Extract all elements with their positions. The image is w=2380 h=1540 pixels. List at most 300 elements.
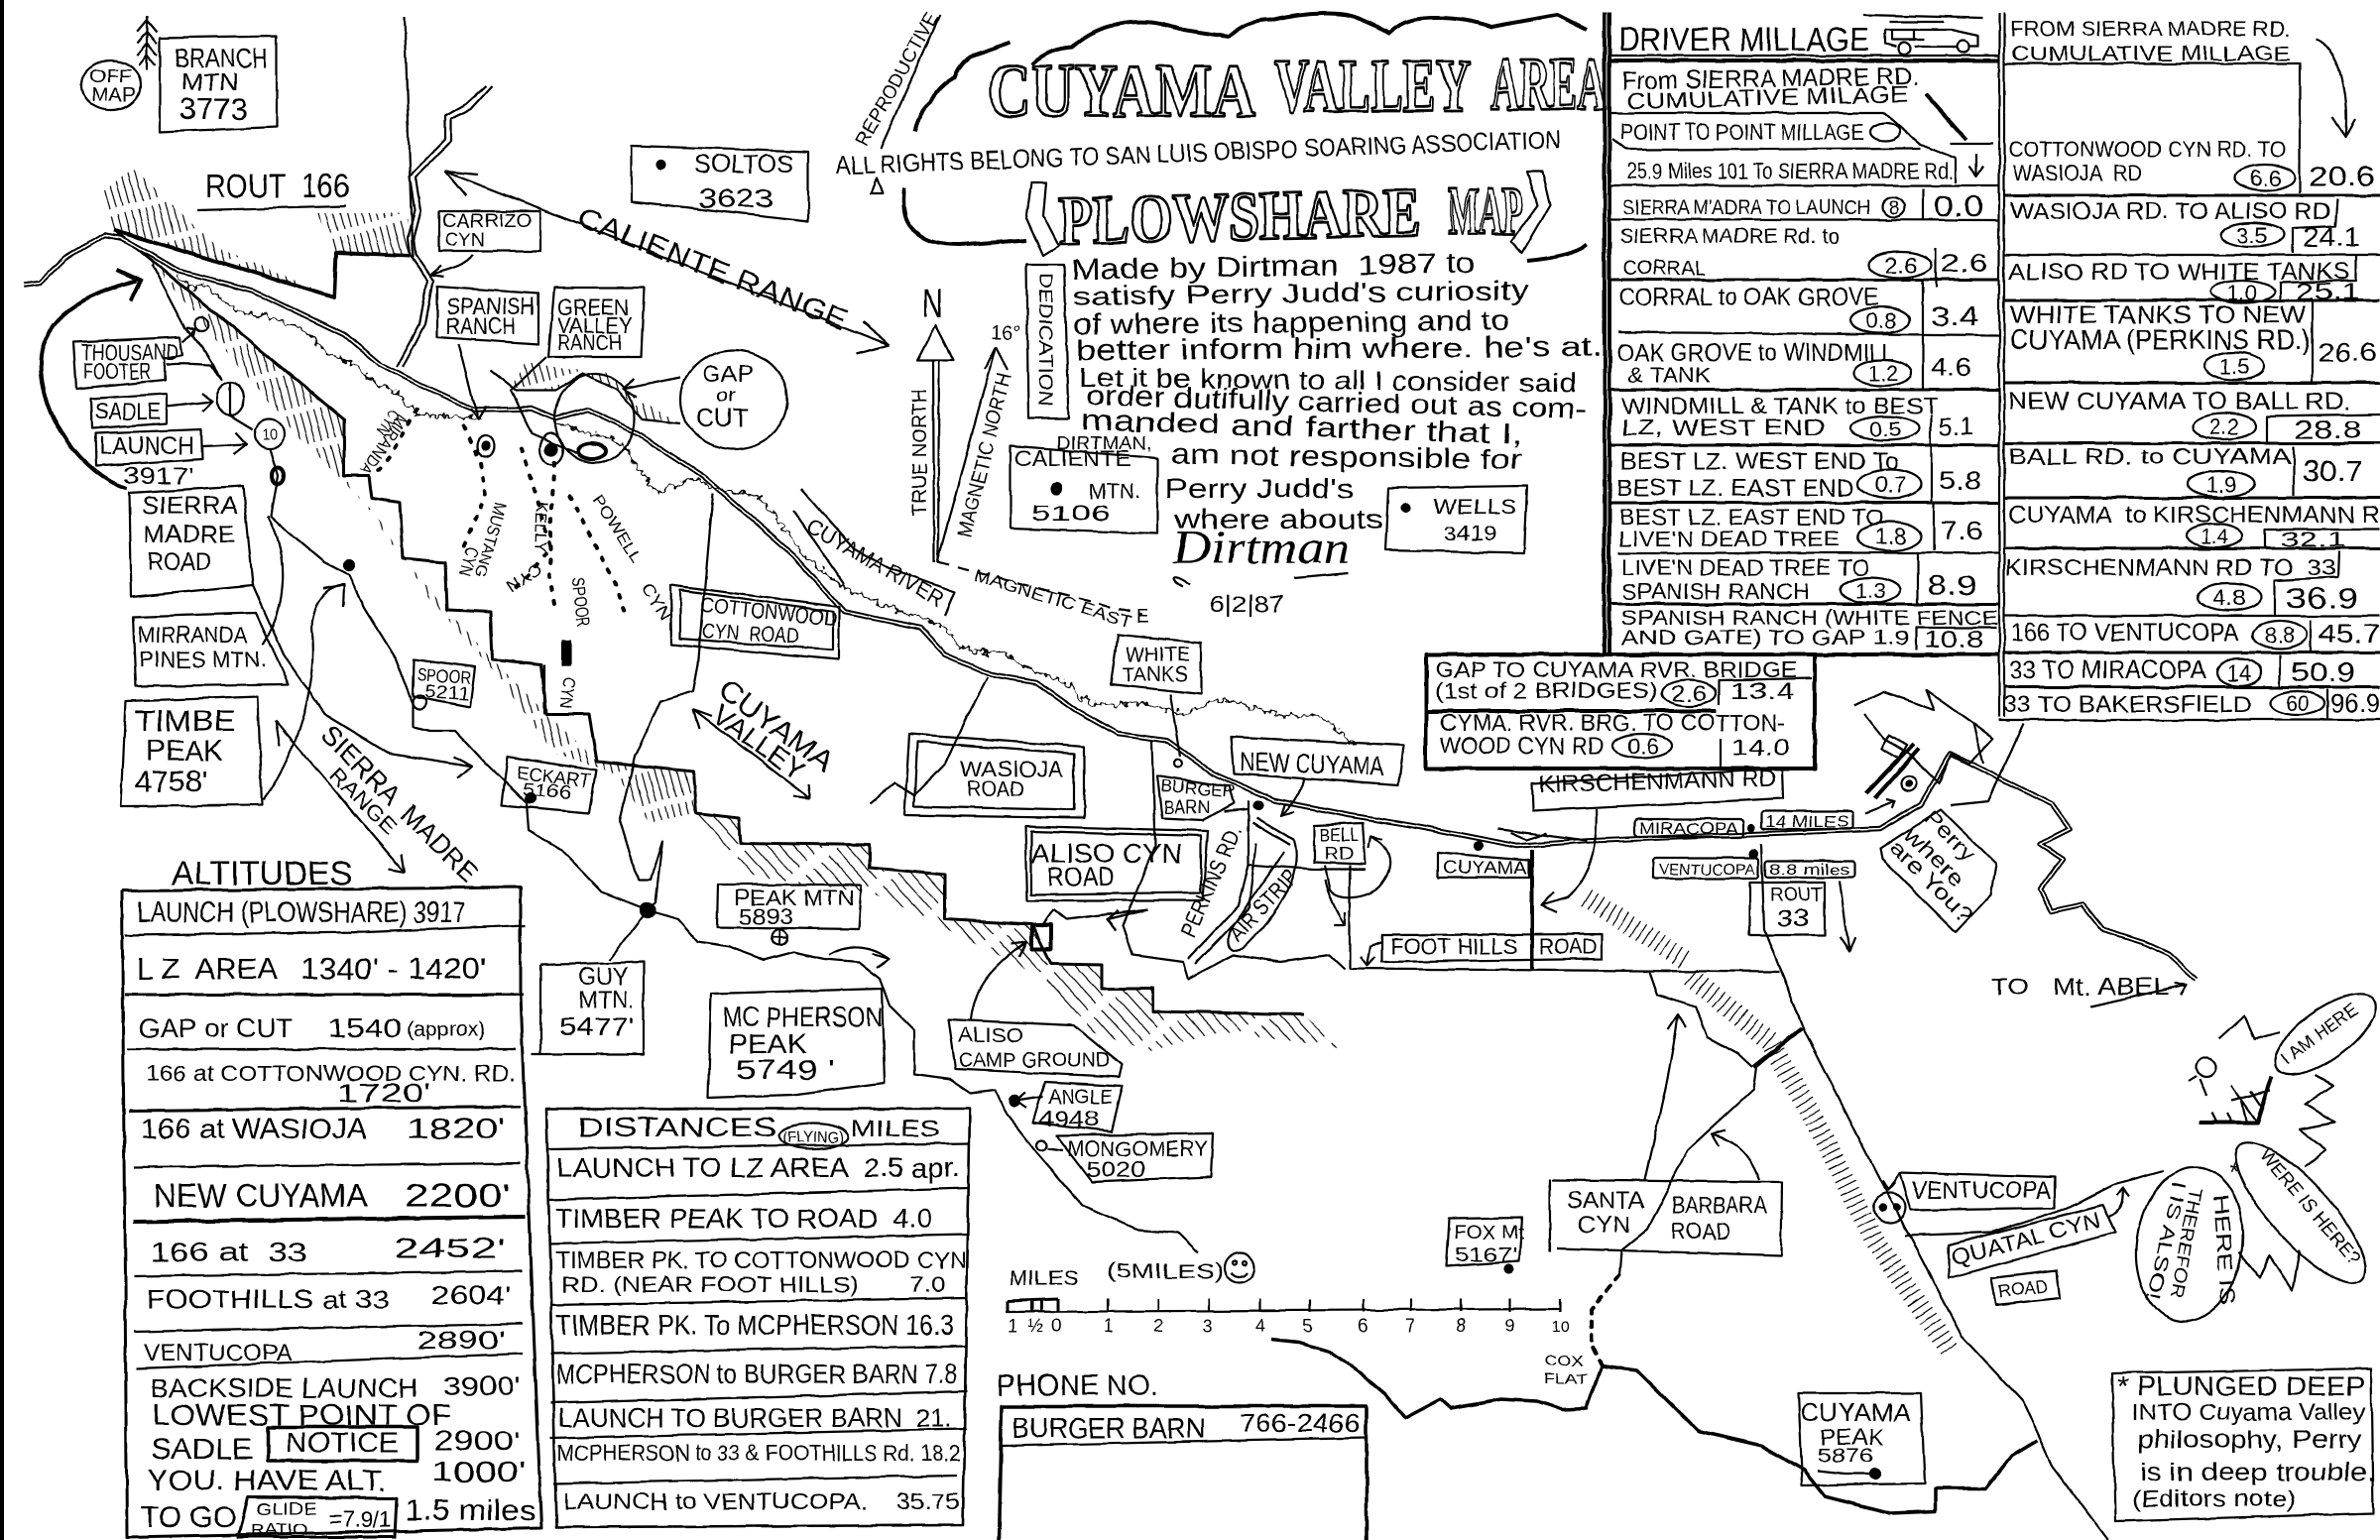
bubble: I am here [2263,980,2380,1089]
row: live and dead tree to Spanish Ranch [1611,553,1999,604]
panel: phone numbers: BURGER BARN [1012,1413,1205,1445]
scale bar: miles [1006,1253,1570,1336]
row: Aliso to White Tanks: ALISO RD TO WHITE TANKS [2008,259,2350,286]
tag: Ventucopa 8.8 miles: VENTUCOPA [1658,862,1755,879]
row: Spanish Ranch to gap [1606,607,1999,654]
box: Thousand Footer: FOOTER [83,358,151,384]
header: cumulative millage: CUMULATIVE MILLAGE [2011,43,2291,65]
row: to corral: SIERRA MADRE Rd. to [1619,225,1840,248]
row: you have alt: 1000' [431,1457,526,1488]
row: Aliso to White Tanks: 25.1 [2296,279,2360,305]
row: from Sierra Madre cumulative: CUMULATIVE MILAGE [1625,81,1909,114]
header: cumulative millage: FROM SIERRA MADRE RD. [2010,18,2291,41]
gap or cut hatching, circle and bubble [491,350,787,463]
dedication paragraph: Made by Dirtman 1987 to [1071,248,1476,287]
panel: gap to Cuyama river bridge mileage: CYMA. RVR. BRG. TO COTTON- [1440,710,1785,737]
label: Cox Flat: FLAT [1543,1370,1587,1387]
row: 166 to Ventucopa: 166 TO VENTUCOPA [2010,619,2239,647]
scale bar: miles: 10 [1552,1319,1570,1336]
box: McPherson Peak: 5749 ' [736,1054,835,1085]
box: Mongomery 5020: 5020 [1086,1157,1145,1182]
box: Dedication [1026,265,1069,418]
scale bar: miles: ½ [1028,1316,1043,1336]
box: Thousand Footer: THOUSAND [81,339,178,365]
row: sadle notice: NOTICE [286,1427,399,1458]
row: Kirschenmann to 33: KIRSCHENMANN RD TO 33 [2005,554,2335,580]
arrow and label: Caliente Range: CALIENTE RANGE [572,201,852,337]
box: Rout 33 [1749,883,1825,935]
row: McPherson to Burger Barn: MCPHERSON to BURGER BARN 7.8 [556,1359,958,1389]
row: from Sierra Madre cumulative: From SIERRA MADRE RD. [1621,62,1919,95]
row: Cuyama to Kirschenmann [2004,502,2380,551]
signature and date: Dirtman [1172,522,1350,574]
box: Spanish Ranch: RANCH [446,313,516,340]
box: Green Valley Ranch: RANCH [557,330,622,355]
box: Sierra Madre Road: ROAD [148,548,211,576]
row: Wasioja to Aliso: 3.5 [2236,223,2268,248]
row: Wasioja to Aliso: WASIOJA RD. TO ALISO RD [2010,198,2330,225]
row: Ball Rd to Cuyama [2004,444,2380,498]
box: Cottonwood Cyn Road: CYN ROAD [702,620,800,648]
gap or cut hatching, circle and bubble: or [716,386,736,406]
row: best LZ west to east: 0.7 [1874,472,1907,499]
compass: true and magnetic north: 16° [991,322,1021,344]
label: Cuyama River: CUYAMA RIVER [803,514,948,612]
heading row: distances: MILES [851,1116,940,1142]
bubble: Perry where are you [1880,805,1996,932]
row: corral to oak grove: 0.8 [1865,308,1897,333]
box: Santa Barbara Canyon Road: CYN [1577,1212,1631,1239]
box: Rout 33: ROUT [1770,885,1823,906]
row: Kirschenmann to 33: 36.9 [2286,583,2358,615]
box: Wasioja Road: ROAD [967,776,1024,801]
box: Santa Barbara Canyon Road: ROAD [1671,1219,1730,1245]
row: corral to oak grove: CORRAL to OAK GROVE [1618,284,1879,311]
row: to corral: CORRAL [1622,257,1706,280]
row: windmill to best LZ: LZ, WEST END [1621,415,1825,440]
row: 33 to Bakersfield: 33 TO BAKERSFIELD [2003,691,2251,717]
compass: true and magnetic north [908,280,1021,562]
box: Santa Barbara Canyon Road: SANTA [1567,1187,1644,1214]
box: Cuyama Peak: PEAK [1820,1424,1885,1450]
row: Spanish Ranch to gap: AND GATE) TO GAP 1.9 [1621,627,1909,650]
row: live and dead tree to Spanish Ranch: LIVE'N DEAD TREE TO [1621,555,1869,580]
row: 166 at Cottonwood: 166 at COTTONWOOD CYN. RD. [146,1061,516,1086]
box: Quatal Cyn [1949,1188,2129,1278]
canyon labels: SPOOR [568,576,593,628]
box: Mongomery 5020: MONGOMERY [1067,1136,1208,1161]
canyon dotted trails [372,410,625,714]
box: Aliso Camp Ground: CAMP GROUND [958,1049,1111,1072]
row: New Cuyama: 2200' [405,1177,511,1214]
box: Bell Rd [1314,823,1390,925]
row: Ball Rd to Cuyama: 1.9 [2206,472,2236,497]
row: to go glide ratio [141,1494,536,1539]
compass: true and magnetic north: MAGNETIC NORTH [954,371,1016,539]
row: Ball Rd to Cuyama: 30.7 [2303,455,2362,488]
panel: gap to Cuyama river bridge mileage: 0.6 [1627,734,1659,759]
label: Cox Flat: COX [1544,1353,1584,1369]
panel: phone numbers: 766-2466 [1240,1408,1361,1438]
box: Timbe Peak [121,585,344,806]
row: to corral [1611,225,1999,288]
row: best LZ west to east: BEST LZ. WEST END To [1620,448,1899,475]
row: to launch: 0.0 [1934,190,1983,223]
row: White Tanks to New Cuyama: CUYAMA (PERKINS RD.) [2010,324,2311,355]
box: Branch Mtn: 3773 [179,91,248,126]
box: Timbe Peak: 4758' [135,766,208,798]
row: best LZ to live and dead tree: 7.6 [1941,516,1983,545]
row: Foothills at 33: FOOTHILLS at 33 [147,1284,389,1314]
row: oak grove to windmill: OAK GROVE to WINDMILL [1616,339,1894,367]
panel: gap to Cuyama river bridge mileage: 2.6 [1671,681,1707,706]
row: from Sierra Madre cumulative [1609,62,1993,182]
row: to corral: 2.6 [1941,250,1988,278]
box: Green Valley Ranch: GREEN [557,295,629,321]
box: Peak Mtn: PEAK MTN [734,886,855,910]
box: Sierra Madre Road: MADRE [144,521,235,548]
row: New Cuyama to Ball Rd: 2.2 [2209,415,2239,439]
row: Timber to Cottonwood: TIMBER PK. TO COTTONWOOD CYN [555,1247,967,1274]
box: Branch Mtn: MTN [181,69,238,96]
bubble: here is I therefor is also [2127,1156,2252,1329]
title cloud outline [903,14,1587,261]
box: Guy Mtn: MTN. [579,987,635,1014]
scale bar: miles: 7 [1405,1316,1415,1336]
box: Cottonwood Cyn Road [670,585,839,659]
row: 101 to Sierra Madre: 25.9 Miles 101 To SIERRA MADRE Rd. [1626,159,1954,183]
Sierra Madre road [194,317,354,570]
box: Launch: 3917' [124,463,193,490]
box: Spanish Ranch [437,287,538,457]
row: to launch: SIERRA M'ADRA TO LAUNCH [1622,196,1870,219]
box: Mirranda Pines Mtn: PINES MTN. [139,647,266,672]
row: 166 at Wasioja [141,1114,506,1145]
panel: gap to Cuyama river bridge mileage: GAP TO CUYAMA RVR. BRIDGE [1435,657,1797,682]
box: Santa Barbara Canyon Road: BARBARA [1671,1192,1767,1219]
row: sadle notice: 2900' [433,1426,521,1456]
row: corral to oak grove: 3.4 [1931,301,1978,331]
box: Aliso Cyn Road [1025,826,1208,930]
box: Carrizo Cyn: CARRIZO [442,211,532,232]
box: Mirranda Pines Mtn: MIRRANDA [138,622,249,648]
dedication paragraph: better inform him where. he's at. [1076,331,1602,367]
box: Cuyama Peak [1798,1393,1925,1485]
row: White Tanks to New Cuyama [2004,300,2380,383]
row: gap or cut: (approx) [407,1019,486,1041]
heading row: distances [578,1112,940,1149]
label: To Mt. Abel: TO Mt. ABEL [1991,974,2169,1001]
row: best LZ to live and dead tree [1618,503,1999,553]
row: best LZ west to east [1611,445,1999,503]
row: gap or cut: 1540 [327,1013,402,1043]
box: Cuyama Peak: 5876 [1817,1446,1874,1467]
icon: smiley [1225,1253,1254,1283]
row: launch: LAUNCH (PLOWSHARE) 3917 [137,896,466,929]
label: Perkins Rd: PERKINS RD. [1175,822,1247,941]
scale bar: miles: 5 [1303,1316,1313,1336]
row: 166 at Wasioja: 166 at WASIOJA [141,1114,368,1145]
row: point to point: POINT TO POINT MILLAGE [1620,119,1864,145]
row: 33 to Bakersfield: 60 [2286,691,2310,716]
row: windmill to best LZ: 0.5 [1869,418,1901,441]
box: Timbe Peak: TIMBE [135,705,236,738]
note: editor's note: is in deep trouble. [2140,1459,2375,1486]
row: 33 to Miracopa: 50.9 [2291,656,2355,687]
compass: true and magnetic north: TRUE NORTH [908,389,931,516]
dedication paragraph: order dutifully carried out as com- [1086,380,1588,424]
scale bar: miles: 8 [1456,1316,1466,1336]
box: Aliso Cyn Road: ALISO CYN [1031,838,1182,869]
header: cumulative millage [2003,18,2355,193]
panel: altitudes table [122,888,541,1539]
row: windmill to best LZ: WINDMILL & TANK to BEST [1621,393,1939,418]
label: Rout 166: ROUT 166 [205,168,349,205]
highway 166 road [24,235,2197,980]
row: White Tanks to New Cuyama: WHITE TANKS TO NEW [2010,301,2306,329]
box: Aliso Camp Ground: ALISO [958,1024,1023,1047]
row: White Tanks to New Cuyama: 26.6 [2318,337,2377,367]
box: Rout 33: 33 [1777,905,1810,932]
row: best LZ west to east: 5.8 [1939,467,1981,495]
tag: Miracopa 14 miles [1634,799,1895,838]
row: 166 to Ventucopa [2004,619,2380,652]
row: 33 to Miracopa [2004,654,2380,687]
box: White Tanks [1111,635,1201,768]
row: live and dead tree to Spanish Ranch: 8.9 [1927,570,1976,602]
row: 33 to Bakersfield [1999,688,2380,720]
dedication paragraph: of where its happening and to [1073,305,1509,341]
icon: station wagon [1862,15,1983,55]
box: McPherson Peak: PEAK [728,1028,807,1059]
canyon labels: CYN [372,407,404,439]
row: Timber to Cottonwood: RD. (NEAR FOOT HILLS) 7.0 [561,1272,945,1297]
box: Spanish Ranch: SPANISH [446,294,536,320]
row: Kirschenmann to 33: 4.8 [2213,585,2245,612]
row: backside launch: 3900' [443,1371,521,1401]
row: launch to Burger Barn: LAUNCH TO BURGER BARN 21. [558,1403,952,1433]
box: Mirranda Pines Mtn [133,613,289,686]
box: Cuyama town [1438,842,1529,878]
box: Dedication: DEDICATION [1034,273,1055,407]
scale bar: miles: (5MILES) [1107,1260,1224,1283]
box: Green Valley Ranch [511,288,645,465]
box: Eckart 5166 [502,757,596,813]
box: Bell Rd: RD [1324,844,1354,864]
row: Foothills at 33 [147,1280,511,1314]
note: editor's note: * PLUNGED DEEP [2117,1371,2365,1401]
box: Cottonwood Cyn Road: COTTONWOOD [699,594,838,631]
box: Launch: LAUNCH [99,432,194,460]
bubble: off map: MAP [91,84,137,106]
scale bar: miles: 2 [1153,1316,1163,1336]
row: best LZ to live and dead tree: 1.8 [1874,524,1907,550]
box: Burger Barn: BARN [1163,797,1210,817]
box: McPherson Peak: MC PHERSON [723,1002,883,1032]
box: Wells 3419: WELLS [1433,496,1517,519]
arrow and label: Sierra Madre Range: SIERRA MADRE [315,719,484,888]
row: Foothills at 33: 2604' [431,1280,511,1310]
bubble: here is I therefor is also: * [2229,1156,2239,1186]
icon: pine tree [137,16,157,69]
scale bar: miles: 4 [1254,1316,1264,1336]
row: 33 to Miracopa: 33 TO MIRACOPA [2010,654,2207,684]
canyon labels: POWELL [589,491,646,566]
box: Soltos [632,146,808,221]
canyon labels: KELLY [531,501,551,552]
row: to go glide ratio: RATIO [251,1520,307,1539]
dedication paragraph: Let it be known to all I consider said [1079,363,1577,398]
arrow and label: Caliente Range [445,172,890,354]
label and arrow: Cuyama Valley: CUYAMA [712,673,839,778]
box: Wasioja Road: WASIOJA [960,757,1064,781]
dedication paragraph: satisfy Perry Judd's curiosity [1073,276,1530,311]
box: Cuyama Peak: CUYAMA [1800,1399,1911,1427]
box: Carrizo Cyn [430,211,540,277]
row: launch to Ventucopa: LAUNCH to VENTUCOPA. 35.75 [563,1488,960,1514]
row: Cottonwood to Wasioja [2004,137,2380,195]
terrain: ridge hatching and stepped mountain edge [99,169,1949,1349]
row: McPherson to 33: MCPHERSON to 33 & FOOTHILLS Rd. 18.2 [557,1440,960,1466]
box: Burger Barn [1157,775,1262,820]
row: Aliso to White Tanks: 1.0 [2227,282,2257,304]
dedication paragraph [1056,248,1602,534]
row: Cuyama to Kirschenmann: CUYAMA to KIRSCHENMANN R [2008,502,2380,529]
box: White Tanks: WHITE [1126,644,1190,666]
row: Wasioja to Aliso: 24.1 [2303,222,2360,252]
label: Magnetic East: MAGNETIC EAST [972,566,1133,632]
row: LZ area: 1340' - 1420' [300,953,486,986]
gap or cut hatching, circle and bubble: CUT [696,403,749,432]
row: 166 to Ventucopa: 45.7 [2319,619,2380,649]
row: New Cuyama [154,1177,511,1214]
river: Cuyama river squiggle [178,275,1355,744]
box: McPherson Peak [708,947,890,1098]
scale bar: miles: 9 [1505,1316,1515,1336]
row: 166 at Wasioja: 1820' [407,1114,506,1145]
loop arrow to launch area [41,270,141,489]
box: Angle 4948: ANGLE [1048,1086,1113,1109]
row: live and dead tree to Spanish Ranch: SPANISH RANCH [1621,579,1810,604]
arrow and label: Sierra Madre Range: RANGE [324,763,402,840]
box: Caliente Mtn: 5106 [1031,501,1111,526]
panel: distances table [546,1109,970,1527]
row: Cottonwood to Wasioja: 6.6 [2249,166,2281,190]
row: 166 at Cottonwood: 1720' [337,1078,431,1108]
row: to launch: 8 [1888,198,1899,219]
panel: gap to Cuyama river bridge mileage [1426,654,1815,769]
box: Santa Barbara Canyon Road [1550,1014,1782,1255]
row: backside launch [150,1371,521,1403]
signature and date [1172,522,1350,617]
box: Angle 4948 [1010,1082,1123,1131]
bubble: here is I therefor is also: HERE IS [2208,1194,2239,1306]
bubble: Air Strip: AIR STRIP [1224,865,1302,945]
box: Caliente Mtn: CALIENTE [1014,446,1130,471]
box: Branch Mtn [160,36,277,132]
box: Green Valley Ranch: VALLEY [557,313,633,338]
row: corral to oak grove [1618,280,1999,389]
row: oak grove to windmill: 1.2 [1868,361,1898,386]
row: New Cuyama to Ball Rd: NEW CUYAMA TO BALL RD. [2008,388,2350,415]
box: White Tanks: TANKS [1123,663,1188,686]
row: 166 to Ventucopa: 8.8 [2265,623,2295,648]
row: Ball Rd to Cuyama: BALL RD. to CUYAMA [2008,444,2291,469]
row: to launch [1609,188,1999,223]
box: Sadle: SADLE [95,399,161,425]
scale bar: miles: 1 [1008,1316,1017,1336]
label and arrow: Cuyama Valley [693,673,839,798]
row: Spanish Ranch to gap: SPANISH RANCH (WHITE FENCE [1621,607,1998,630]
dedication paragraph: DIRTMAN, [1056,433,1152,454]
row: Ventucopa: VENTUCOPA [144,1340,293,1366]
row: oak grove to windmill: 4.6 [1931,352,1971,382]
box: Wells 3419: 3419 [1444,523,1496,545]
row: best LZ to live and dead tree: LIVE'N DEAD TREE [1618,527,1840,551]
row: Aliso to White Tanks [2004,256,2380,305]
label: Reproductive with triangle: REPRODUCTIVE [852,9,943,149]
row: you have alt [147,1457,526,1497]
tag: Miracopa 14 miles: MIRACOPA [1639,819,1739,838]
box: Sierra Madre Road: SIERRA [142,492,238,520]
heading row: distances: DISTANCES [578,1112,776,1142]
row: 33 to Miracopa: 14 [2227,660,2251,687]
box: Kirschenmann Rd [1532,766,1783,912]
dedication paragraph: am not responsible for [1170,438,1522,475]
dedication paragraph: Perry Judd's [1165,473,1354,504]
row: Cottonwood to Wasioja: COTTONWOOD CYN RD. TO [2008,137,2286,162]
box: Peak Mtn [717,885,862,945]
box: Thousand Footer [73,327,222,389]
row: LZ area [137,953,486,986]
row: Cuyama to Kirschenmann: 32.1 [2281,529,2345,551]
box: Peak Mtn: 5893 [739,904,793,929]
title: Cuyama Valley Area: AREA [1490,43,1606,126]
canyon labels: MUSTANG [471,500,510,579]
scale bar: miles: 0 [1051,1316,1061,1336]
label and arrow: Cuyama Valley: VALLEY [706,699,811,787]
bubble: Perry where are you: where [1899,821,1969,892]
bubble: I am here: I AM HERE [2278,1000,2361,1068]
panel: gap to Cuyama river bridge mileage: 13.4 [1730,678,1795,705]
scale bar: miles: MILES [1009,1267,1079,1290]
box: Launch [95,429,247,490]
box: Foot Hills Road: ROAD [1540,934,1597,959]
box: Foot Hills Road [1361,934,1602,966]
subtitle: rights statement: ALL RIGHTS BELONG TO SAN LUIS OBISPO SOARING ASSOCIATION [835,124,1562,180]
row: 166 at 33: 166 at 33 [150,1237,307,1267]
title: Plowshare Map: PLOWSHARE [1058,175,1421,260]
box: Caliente Mtn: MTN. [1089,479,1140,504]
box: Carrizo Cyn: CYN [445,230,485,251]
label: Magnetic East: E [1136,607,1149,628]
scale bar: miles: 6 [1358,1316,1368,1336]
box: Guy Mtn: 5477' [559,1013,635,1041]
row: to corral: 2.6 [1884,253,1918,278]
bubble: here is I therefor is also: I IS ALSO! [2142,1179,2190,1301]
row: New Cuyama to Ball Rd [2004,388,2380,444]
Sierra Madre road: 10 [263,427,278,444]
bubble: Perry where are you: are You? [1884,835,1978,928]
note: editor's note: INTO Cuyama Valley [2132,1399,2365,1426]
canyon labels: CYN [638,579,675,625]
row: gap or cut: GAP or CUT [139,1013,293,1043]
row: Ventucopa [144,1327,506,1366]
sketch: pilot and glider [2189,1016,2280,1123]
panel: driver millage header: DRIVER MILLAGE [1618,21,1869,58]
title: Cuyama Valley Area: VALLEY [1274,45,1471,128]
row: White Tanks to New Cuyama: 1.5 [2219,354,2249,379]
